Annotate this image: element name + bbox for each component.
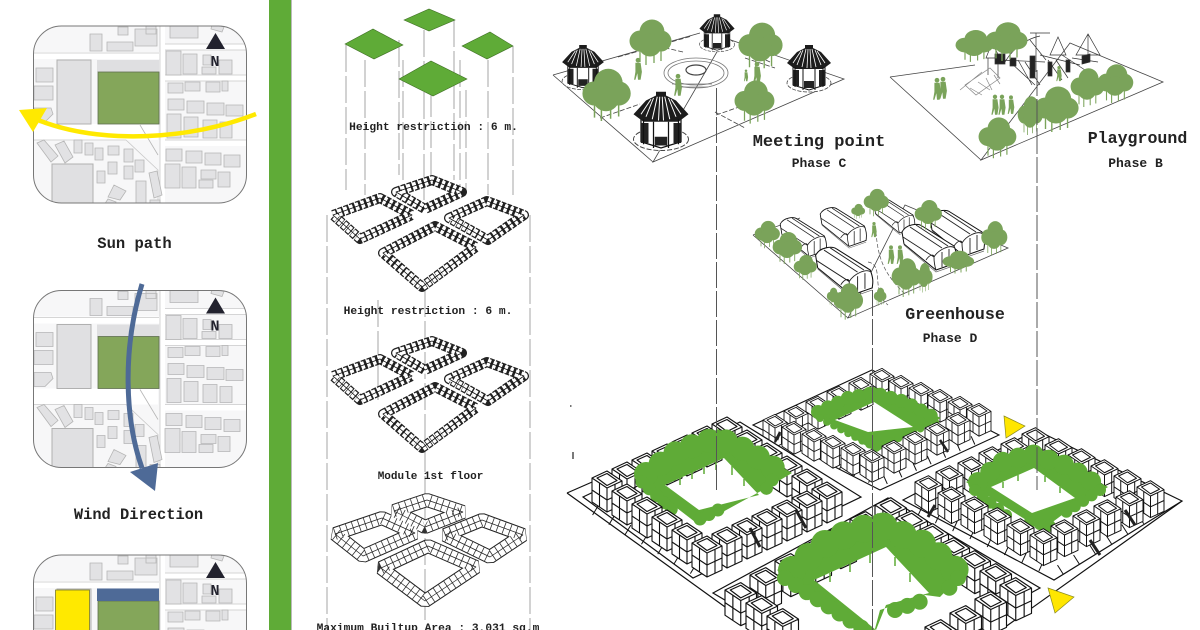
label: second height restriction: Height restriction : 6 m.: [344, 306, 512, 318]
site plate: [553, 33, 844, 162]
panel: exploded axonometric layers: [317, 9, 540, 630]
subtitle: phase D: Phase D: [923, 331, 978, 346]
title: greenhouse: Greenhouse: [905, 305, 1005, 324]
arrow marker: upper yellow triangle: [1004, 416, 1025, 438]
fountain: [664, 58, 728, 88]
projection lines linking vignettes to master plan: [716, 70, 1037, 630]
layer guide lines: [327, 20, 530, 630]
subtitle: phase B: Phase B: [1108, 156, 1163, 171]
access paths: [868, 232, 906, 305]
title: playground: Playground: [1088, 129, 1187, 148]
panel: site analysis maps: [19, 24, 256, 630]
trees: [755, 189, 1007, 320]
panel: master plan axonometric: [567, 368, 1182, 630]
trees: [956, 22, 1133, 158]
people: [933, 66, 1062, 115]
gazebos: [562, 14, 831, 151]
map: sun path: [19, 24, 256, 207]
paths: [600, 36, 775, 128]
greenhouses: [780, 199, 984, 297]
site plate: [753, 205, 1008, 318]
roof layer: four green plots: [345, 9, 513, 96]
label: module first floor: Module 1st floor: [378, 471, 483, 483]
people: [634, 58, 761, 96]
block: left: [583, 417, 861, 578]
map: wind direction: [33, 284, 247, 491]
block: rear: [753, 368, 999, 490]
green divider bar: [269, 0, 292, 630]
phase vignette: greenhouse: [753, 189, 1008, 346]
title: meeting point: Meeting point: [753, 133, 885, 152]
layer: second floor modules: [333, 180, 524, 287]
label: sun path: Sun path: [97, 235, 172, 253]
block: front: [713, 498, 1040, 630]
label: roof height restriction: Height restriction : 6 m.: [349, 122, 518, 134]
map: zoning: [33, 553, 247, 630]
phase vignette: meeting point: [553, 14, 885, 171]
layer: maximum built-up footprint: [335, 500, 523, 601]
stray marks: [570, 406, 573, 459]
block: right: [903, 428, 1182, 580]
trees: [582, 20, 783, 124]
site plate: [890, 43, 1163, 160]
people: [871, 222, 903, 264]
subtitle: phase C: Phase C: [792, 156, 847, 171]
label: wind direction: Wind Direction: [74, 506, 203, 524]
site outline: [567, 472, 1182, 630]
layer: first floor modules: [333, 341, 524, 448]
arrow marker: lower yellow triangle: [1048, 588, 1074, 613]
play structure: [960, 33, 1100, 95]
phase vignette: playground: [890, 22, 1187, 171]
